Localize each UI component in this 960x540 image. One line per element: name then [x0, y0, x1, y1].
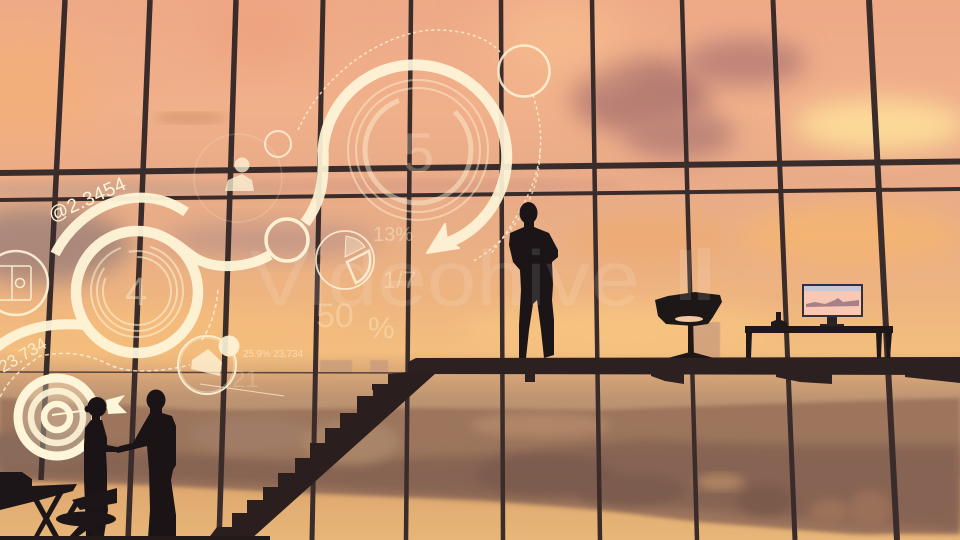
- forest on the river bank: [0, 398, 960, 534]
- fraction label: 1/7: [383, 267, 416, 294]
- ribbon circle 4 with connecting curves: [0, 231, 270, 353]
- silhouette: office chair bottom left: [56, 488, 117, 538]
- digit 5: 5: [403, 121, 434, 184]
- number label @2.3454: @2.3454: [45, 173, 130, 227]
- staircase: [207, 372, 436, 540]
- computer monitor with chart: [802, 284, 863, 326]
- clouds in the sky: [0, 0, 960, 359]
- silhouette: chair: [655, 292, 722, 358]
- node ring on the ribbon: [266, 219, 308, 261]
- small ring near person icon: [265, 131, 291, 157]
- river: [0, 478, 960, 540]
- big arrow arc 5: [305, 65, 507, 253]
- lower floor: [0, 536, 270, 540]
- concentric rings around digit 5: [348, 80, 488, 220]
- distant city skyline: [320, 322, 720, 374]
- envelope ring icon: [178, 336, 284, 396]
- percent 50%: 50: [316, 297, 354, 335]
- small number labels: 25.9% 23.734: [243, 349, 303, 360]
- upper floor platform: [408, 357, 960, 384]
- target with arrow icon: [18, 378, 127, 456]
- upper arc around @2.3454: [55, 198, 186, 254]
- silhouette: man shaking hands: [112, 390, 176, 538]
- dashed orbit around arc 5: [298, 30, 541, 255]
- text: %: [368, 312, 395, 345]
- person icon with faint ring: [194, 134, 282, 222]
- silhouette: man standing on platform: [509, 202, 558, 358]
- infographic overlay: [0, 30, 550, 456]
- digit 4: 4: [125, 270, 147, 314]
- concentric rings around digit 4: [91, 245, 183, 337]
- dashed curves to the target: [0, 353, 190, 397]
- document ring icon: [0, 251, 48, 315]
- pie chart ring icon: [316, 231, 374, 289]
- silhouette: table bottom left: [0, 472, 77, 538]
- digits 21: 21: [232, 366, 259, 393]
- silhouette: desk: [745, 312, 893, 358]
- watermark: Videohive: [250, 234, 640, 322]
- percent 13%: 13%: [373, 224, 413, 246]
- ring top right: [498, 46, 550, 96]
- silhouette: woman shaking hands: [84, 397, 122, 536]
